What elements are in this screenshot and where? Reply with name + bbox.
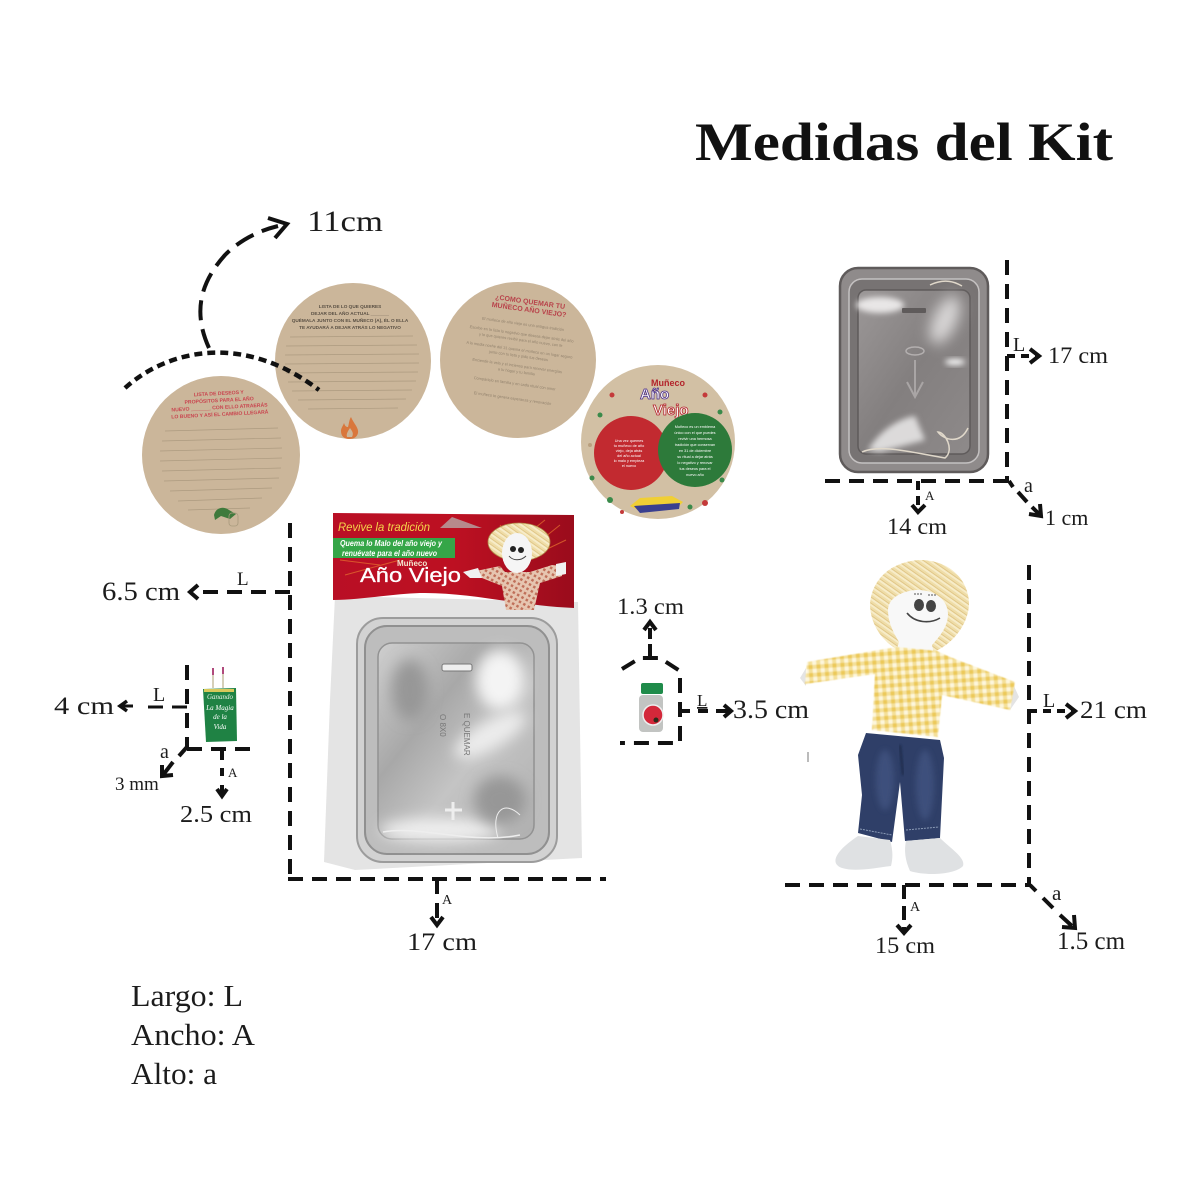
label: 3 mm: 3 mm xyxy=(115,774,159,795)
coaster: cómo quemar: a tu hogar y tu familia xyxy=(498,366,536,377)
coaster: Muñeco Año Viejo: nuevo año xyxy=(686,473,704,477)
incense box: Ganando xyxy=(207,693,234,701)
doll head xyxy=(888,590,948,654)
label: 14 cm: 14 cm xyxy=(887,514,947,539)
coaster: lista de lo que quieres dejar: TE AYUDARÁ A DEJAR ATRÁS LO NEGATIVO xyxy=(299,324,401,330)
foil tray in bag: O 8X0 xyxy=(438,714,447,737)
coaster: lista de deseos: LO BUENO Y ASÍ EL CAMBIO LLEGARÁ xyxy=(171,407,269,421)
incense box: La Magia xyxy=(205,704,234,712)
foil tray in bag xyxy=(357,618,557,862)
dimension: doll a xyxy=(1030,881,1075,928)
red header card: Año Viejo xyxy=(360,565,461,587)
coaster: Muñeco Año Viejo: Una vez quemes xyxy=(615,439,643,443)
panel: packaged kit xyxy=(324,513,582,870)
coaster: cómo quemar: Escribe en la lista lo negativo que deseas dejar atrás del año xyxy=(469,324,574,344)
label: 15 cm: 15 cm xyxy=(875,933,935,958)
red header card: Muñeco xyxy=(397,559,427,568)
coaster: lista de deseos: NUEVO _______ CON ELLO ATRAERÁS xyxy=(171,401,268,414)
dimension: incense a: a xyxy=(160,741,169,763)
coaster: cómo quemar: El muñeco de año viejo es una antigua tradición xyxy=(482,316,564,332)
coaster: Muñeco Año Viejo: tus deseos para el xyxy=(679,467,711,471)
dimension: pack L: L xyxy=(237,569,249,590)
coaster: cómo quemar: MUÑECO AÑO VIEJO? xyxy=(491,300,567,319)
coaster: Muñeco Año Viejo: su ritual a dejar atrás xyxy=(677,455,713,459)
dimension: incense L: L xyxy=(153,684,165,706)
label: 1.5 cm: 1.5 cm xyxy=(1057,928,1126,955)
coaster: Muñeco Año Viejo: tu muñeco de año xyxy=(614,444,644,448)
coaster: Muñeco Año Viejo: único con el que puedes xyxy=(674,431,716,435)
red header card xyxy=(333,513,574,610)
dimension: tray a: a xyxy=(1024,475,1033,497)
coaster: Muñeco Año Viejo: el nuevo xyxy=(622,464,636,468)
title: Medidas del Kit xyxy=(695,111,1113,172)
dimension: doll A: A xyxy=(910,900,921,915)
dimension: doll L: L xyxy=(1043,690,1055,712)
doll on pack xyxy=(463,523,566,610)
doll shirt xyxy=(805,647,1015,737)
incense box xyxy=(203,667,237,742)
coaster: Muñeco Año Viejo: Muñeco es un emblema xyxy=(675,425,716,429)
dimension: incense A xyxy=(217,749,238,796)
label: 4 cm: 4 cm xyxy=(54,693,115,720)
coaster: lista de lo que quieres dejar xyxy=(275,283,431,439)
coaster: Muñeco Año Viejo: revivir una hermosa xyxy=(678,437,713,441)
coaster: cómo quemar: Enciende la vela y el incienso para renovar energías xyxy=(472,357,562,374)
legend: Alto: a xyxy=(131,1056,217,1091)
label: 2.5 cm: 2.5 cm xyxy=(180,802,252,828)
dimension: tray A xyxy=(825,481,1010,512)
dimension: incense L xyxy=(120,665,187,750)
stray mark xyxy=(807,752,809,762)
coaster: Muñeco Año Viejo: Año xyxy=(640,386,669,403)
coaster: Muñeco Año Viejo: viejo, deja atrás xyxy=(616,449,642,453)
coaster: Muñeco Año Viejo: Viejo xyxy=(653,402,689,419)
coaster: lista de deseos: LISTA DE DESEOS Y xyxy=(194,390,245,398)
doll pants xyxy=(858,733,944,842)
coaster: cómo quemar: A la media noche del 31 quema el muñeco en un lugar seguro xyxy=(466,340,573,360)
coaster: Muñeco Año Viejo: lo negativo y renovar xyxy=(677,461,713,465)
doll face xyxy=(907,594,940,622)
incense box: de la xyxy=(213,713,227,721)
dimension: tray A: A xyxy=(925,488,935,503)
label: 1 cm: 1 cm xyxy=(1045,505,1088,530)
dimension: bottle outline and top xyxy=(620,622,680,743)
bottle xyxy=(639,683,663,732)
coaster: Muñeco Año Viejo: en 31 de diciembre xyxy=(679,449,711,453)
label: 21 cm: 21 cm xyxy=(1080,697,1148,724)
label: 1.3 cm: 1.3 cm xyxy=(617,594,684,619)
legend xyxy=(131,978,256,1091)
coaster: cómo quemar: Compártelo en familia y en cada ritual con amor xyxy=(473,375,557,392)
dimension: bottle L: L xyxy=(697,691,707,710)
dimension: tray L xyxy=(1007,260,1039,482)
foil tray in bag: E QUEMAR xyxy=(462,713,471,756)
coaster: cómo quemar: El muñeco te genera esperanza y renovación xyxy=(474,390,552,406)
incense box: Vida xyxy=(214,723,227,731)
dimension: doll L xyxy=(1029,565,1075,886)
label: 17 cm tray: 17 cm xyxy=(1048,343,1108,368)
pack text: Revive la tradición xyxy=(338,520,430,534)
coaster: lista de deseos: PROPÓSITOS PARA EL AÑO xyxy=(184,394,254,406)
disc group: paper coasters with rotation arrows xyxy=(125,205,735,534)
rotation arc: dotted xyxy=(125,353,319,390)
doll hat xyxy=(870,560,969,651)
dimension: tray L: L xyxy=(1013,334,1025,356)
coaster: lista de lo que quieres dejar: LISTA DE LO QUE QUIERES xyxy=(319,304,381,309)
legend: Largo: L xyxy=(131,978,243,1013)
coaster: lista de lo que quieres dejar: QUÉMALA JUNTO CON EL MUÑECO (A), ÉL O ELLA xyxy=(292,316,409,323)
dimension: doll A xyxy=(785,885,1031,933)
coaster: cómo quemar: y lo que quieres recibir para el año nuevo, con fe xyxy=(479,331,563,348)
dimension: pack A: A xyxy=(442,893,453,908)
dimension: tray a xyxy=(1009,475,1041,516)
dimension: pack L xyxy=(190,523,290,880)
label: 17 cm pack: 17 cm xyxy=(407,929,478,956)
dimension: pack A xyxy=(288,879,606,925)
legend: Ancho: A xyxy=(131,1017,256,1052)
coaster: lista de lo que quieres dejar: DEJAR DEL AÑO ACTUAL _______ xyxy=(311,310,389,316)
coaster: cómo quemar: ¿COMO QUEMAR TU xyxy=(495,294,565,311)
doll shoes xyxy=(835,836,892,870)
coaster: Muñeco Año Viejo: del año actual xyxy=(617,454,641,458)
plastic bag xyxy=(324,596,582,870)
doll hands xyxy=(800,668,1019,710)
coaster: lista de deseos xyxy=(142,376,300,534)
coaster: Muñeco Año Viejo xyxy=(581,365,735,519)
red header card: Quema lo Malo del año viejo y xyxy=(340,538,443,548)
coaster: Muñeco Año Viejo: Muñeco xyxy=(651,378,686,388)
coaster: Muñeco Año Viejo: tradición que conservan xyxy=(675,443,715,447)
coaster: cómo quemar xyxy=(440,282,596,438)
coaster: Muñeco Año Viejo: lo malo y empieza xyxy=(614,459,645,463)
dimension: incense A: A xyxy=(228,765,238,780)
red header card: renuévate para el año nuevo xyxy=(342,548,437,558)
label: 11cm: 11cm xyxy=(307,205,383,238)
panel: doll xyxy=(800,560,1019,874)
curved arrow to 11 cm xyxy=(200,218,287,348)
panel: foil tray xyxy=(840,268,988,472)
label: 3.5 cm: 3.5 cm xyxy=(733,695,809,724)
coaster: cómo quemar: junto con tu lista y pide tus deseos xyxy=(488,349,548,362)
dimension: incense a xyxy=(160,741,258,776)
dimension: doll a: a xyxy=(1052,881,1062,905)
label: 6.5 cm: 6.5 cm xyxy=(102,577,180,606)
dimension: bottle L xyxy=(680,691,731,717)
